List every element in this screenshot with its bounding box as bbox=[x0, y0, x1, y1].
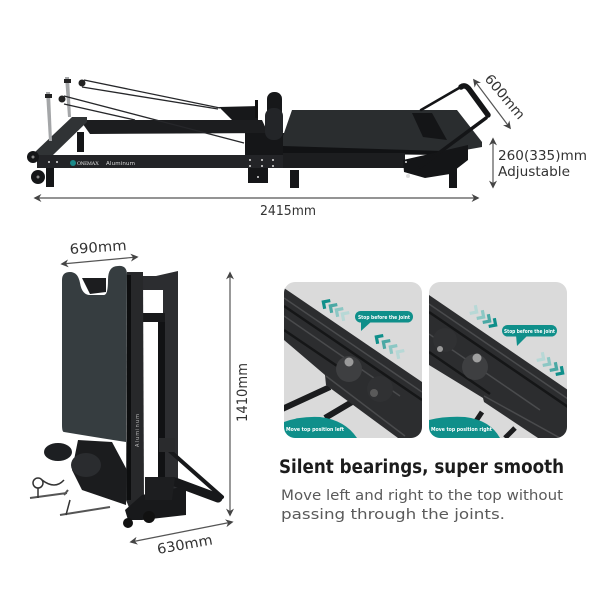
dimension: 630mm bbox=[131, 522, 232, 558]
label: 1410mm: 1410mm bbox=[235, 363, 251, 422]
body text bbox=[281, 488, 564, 523]
callout: Stop before the joint bbox=[358, 315, 410, 321]
rear legs and wheels bbox=[27, 132, 457, 188]
panel background bbox=[429, 282, 567, 438]
tab: Move top position left bbox=[286, 427, 344, 433]
rail bbox=[429, 295, 568, 438]
upper carriage rail bbox=[80, 120, 268, 134]
foot bar bbox=[420, 86, 488, 167]
label: 260(335)mm: 260(335)mm bbox=[498, 148, 587, 164]
side rail bbox=[126, 272, 144, 510]
chevrons down bbox=[470, 305, 565, 377]
poles bbox=[46, 77, 71, 141]
brand text: ONEMAX bbox=[77, 161, 99, 167]
arrow: height bbox=[492, 139, 494, 187]
label: Adjustable: Adjustable bbox=[498, 164, 570, 180]
arrow: length bbox=[35, 197, 478, 199]
ropes bbox=[64, 80, 244, 143]
handle bar bbox=[162, 444, 222, 498]
brand mark bbox=[70, 160, 76, 166]
callout: Stop before the joint bbox=[504, 329, 555, 335]
cross bars bbox=[280, 387, 352, 418]
body text: Move left and right to the top without bbox=[281, 488, 564, 504]
second bearing bbox=[373, 378, 393, 392]
strap bbox=[219, 106, 258, 120]
reformer side view bbox=[27, 77, 488, 188]
heading: Silent bearings, super smooth bbox=[279, 457, 564, 478]
callout bbox=[355, 311, 413, 331]
dimension: height bbox=[493, 139, 587, 187]
bearing bbox=[336, 356, 362, 382]
callout bbox=[502, 325, 557, 346]
rail bbox=[284, 288, 422, 438]
pulleys bbox=[45, 79, 86, 102]
label: 690mm: 690mm bbox=[69, 238, 127, 258]
bed bbox=[283, 110, 482, 154]
label: 630mm: 630mm bbox=[156, 532, 214, 558]
machine base bbox=[125, 486, 186, 520]
panel: move left bbox=[280, 282, 422, 438]
carriage body bbox=[72, 440, 127, 505]
frame bolts bbox=[48, 159, 410, 178]
rear frame bbox=[133, 271, 178, 495]
tab bbox=[284, 417, 357, 438]
reformer upright view bbox=[30, 266, 222, 528]
tab: Move top position right bbox=[431, 427, 492, 433]
arrow: 690 bbox=[62, 257, 137, 264]
arrow: 1410 bbox=[229, 273, 231, 515]
dimension: 690mm bbox=[62, 238, 137, 264]
label: 2415mm: 2415mm bbox=[260, 203, 316, 219]
chevrons up bbox=[321, 298, 404, 359]
label: 600mm: 600mm bbox=[481, 71, 528, 123]
foot platform bbox=[35, 117, 87, 155]
headrests bbox=[44, 443, 72, 461]
dimension: width 600mm bbox=[474, 71, 528, 128]
arrow: 630 bbox=[131, 522, 232, 542]
second bearing bbox=[462, 354, 488, 380]
foot bar well bbox=[412, 113, 447, 140]
panel: move right bbox=[429, 282, 568, 438]
lower frame rail bbox=[37, 155, 405, 168]
front frame bbox=[403, 145, 468, 178]
arrow: 600 bbox=[474, 80, 510, 128]
tab bbox=[429, 417, 500, 438]
body text: passing through the joints. bbox=[281, 507, 505, 523]
bearing bbox=[433, 336, 452, 350]
wheel hubs bbox=[32, 156, 40, 178]
bed upright bbox=[62, 266, 127, 442]
rope poles bbox=[30, 490, 110, 515]
rope handles bbox=[33, 478, 70, 515]
cross bars bbox=[470, 412, 515, 438]
shoulder rests bbox=[267, 92, 282, 128]
aluminum label: Aluminum bbox=[135, 414, 141, 447]
panel background bbox=[284, 282, 422, 438]
aluminum text: Aluminum bbox=[106, 161, 135, 167]
